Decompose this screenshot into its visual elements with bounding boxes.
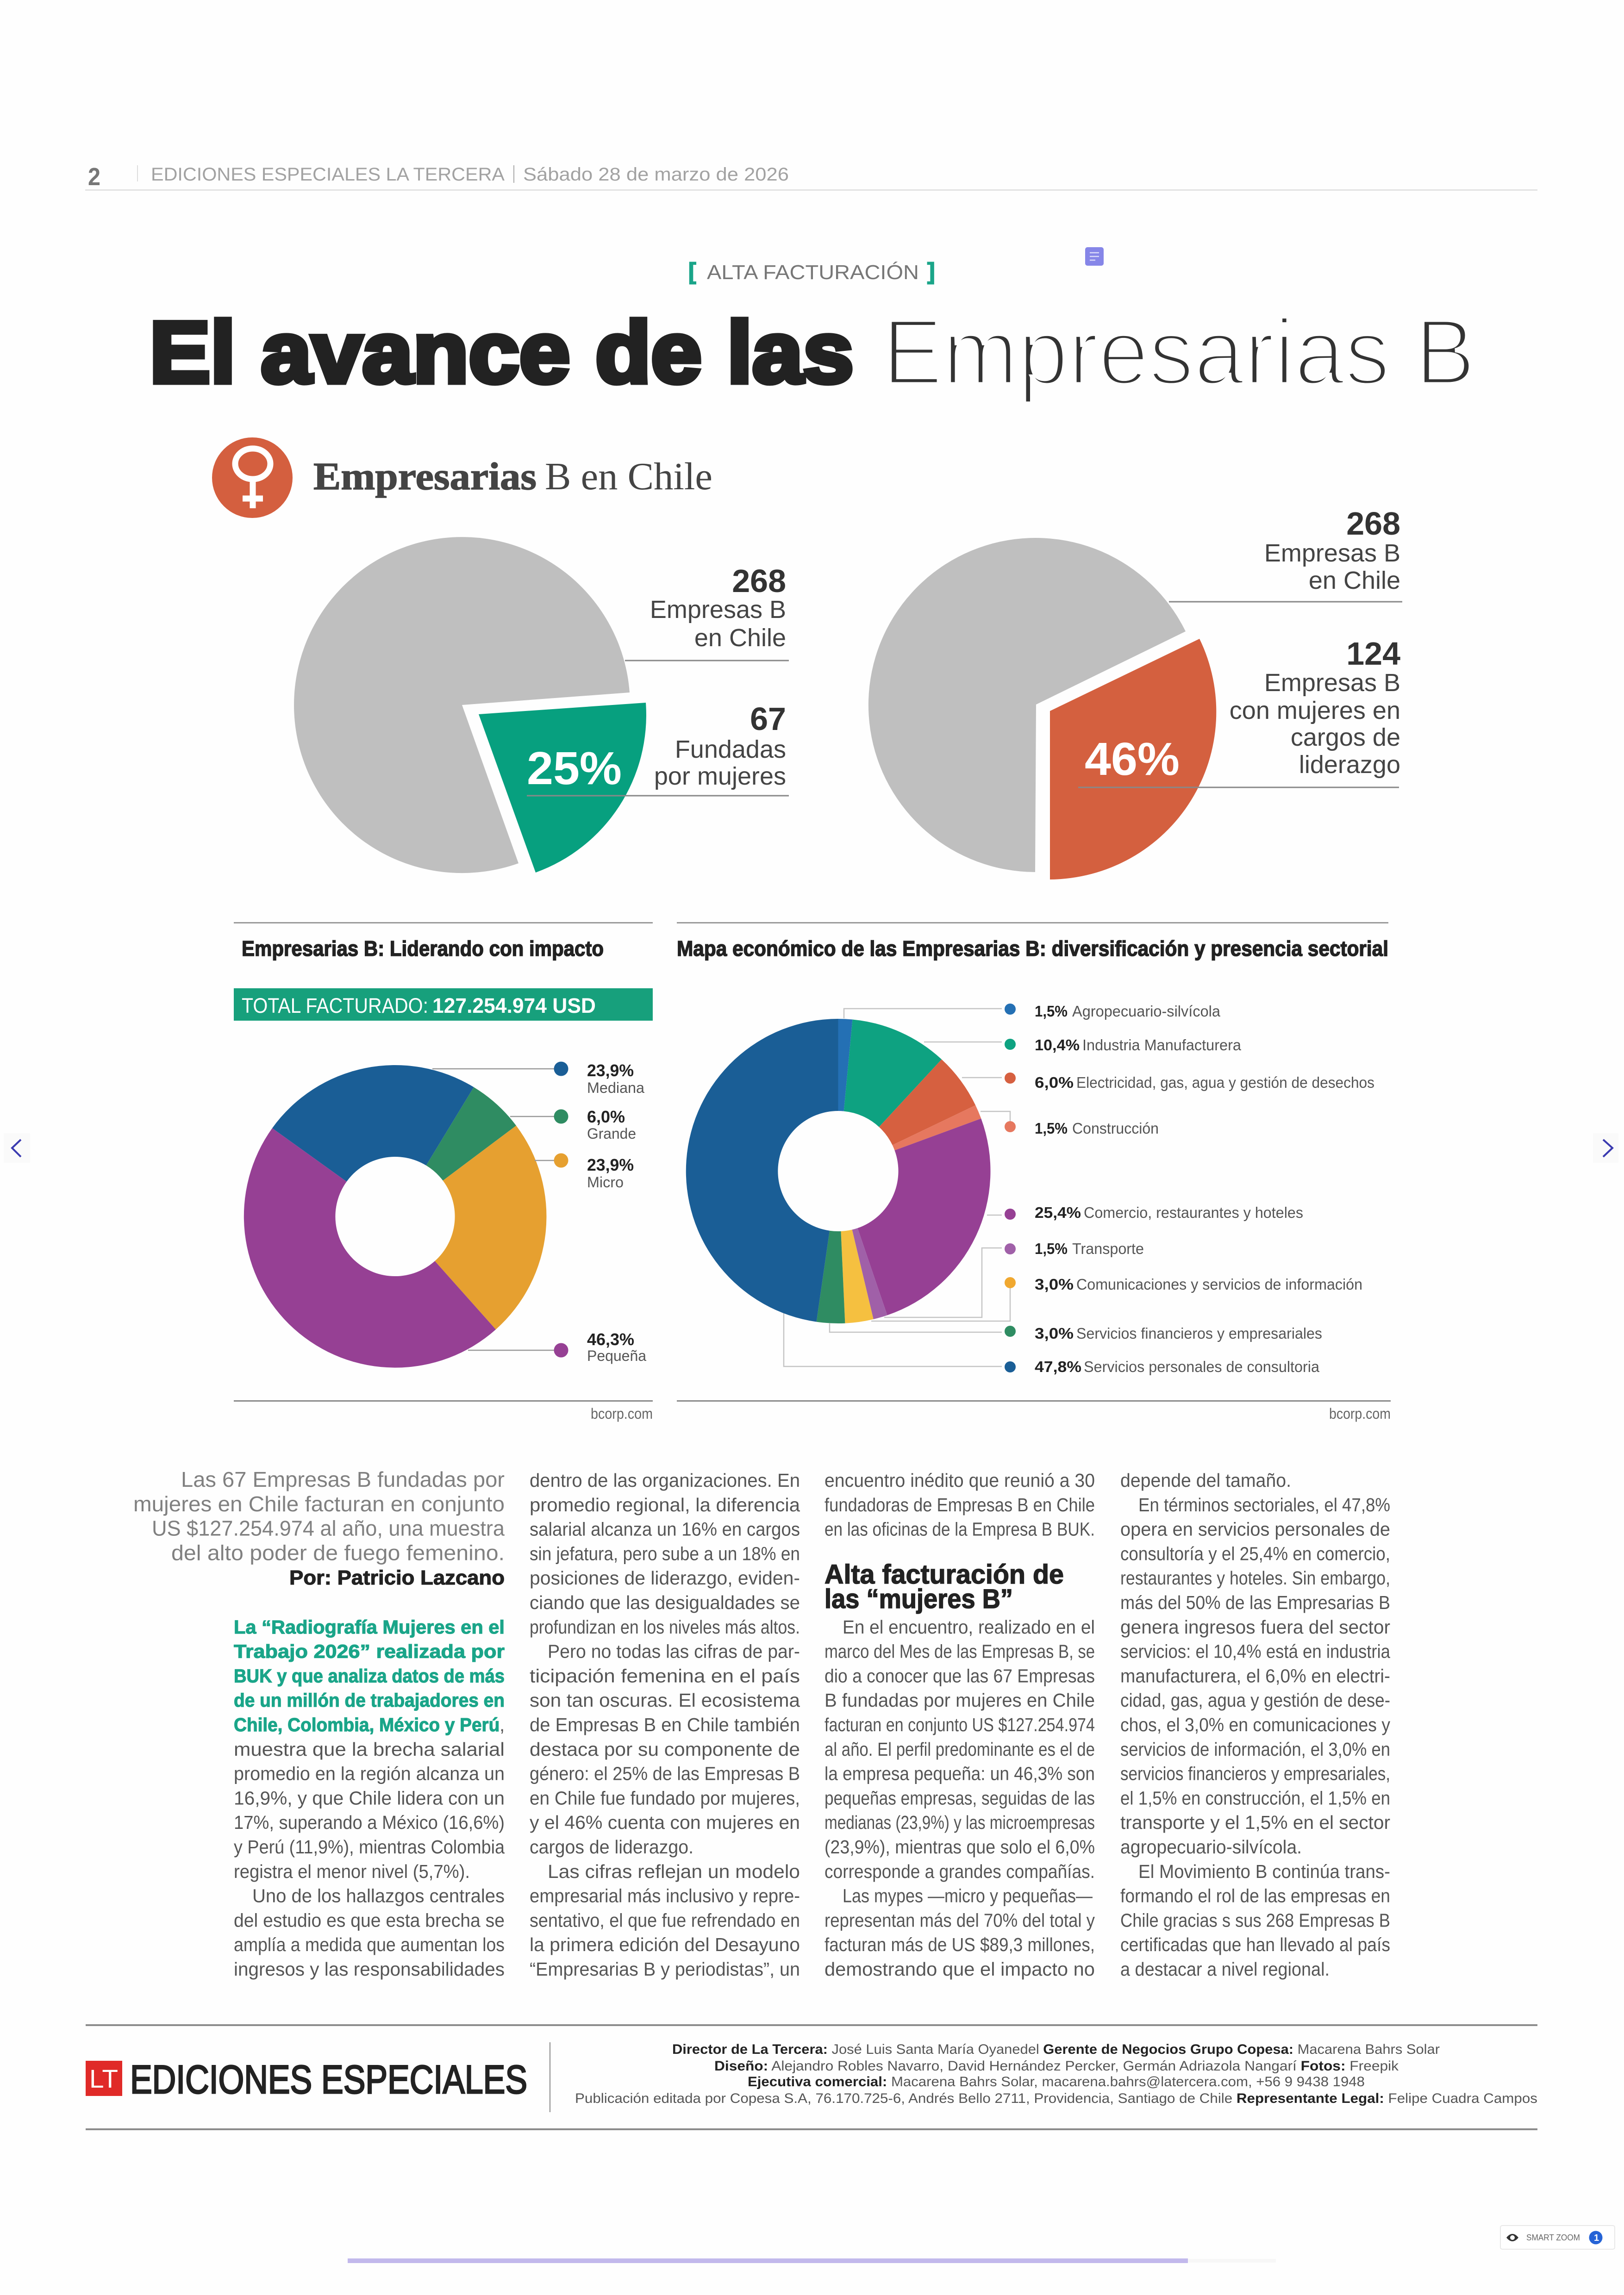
article column 3: en las oficinas de la Empresa B BUK.	[824, 1519, 1095, 1540]
article column 3: encuentro inédito que reunió a 30	[824, 1470, 1095, 1491]
article column 3: B fundadas por mujeres en Chile	[824, 1690, 1095, 1711]
subheading: alta facturación: las “mujeres B”	[824, 1584, 1013, 1614]
article column 2: empresarial más inclusivo y repre-	[530, 1885, 800, 1907]
article column 2: ciando que las desigualdades se	[530, 1592, 800, 1613]
article column 2: promedio regional, la diferencia	[530, 1494, 800, 1515]
legend: sectores: 1,5%	[1035, 1240, 1068, 1257]
pie chart: 25% fundadas por mujeres: 67	[750, 701, 786, 737]
article column 1: del estudio es que esta brecha se	[234, 1909, 505, 1931]
leader lines	[784, 1009, 1010, 1366]
legend: tamaño de empresa: Grande	[587, 1125, 636, 1142]
credits: Director de La Tercera: José Luis Santa María Oyanedel Gerente de Negocios Grupo Copesa: Macarena Bahrs Solar	[672, 2042, 1440, 2057]
article column 1: 17%, superando a México (16,6%)	[234, 1812, 505, 1833]
credits: Diseño: Alejandro Robles Navarro, David Hernández Percker, Germán Adriazola Nangarí Fotos: Freepik	[714, 2058, 1399, 2074]
legend: tamaño de empresa: 23,9%	[587, 1155, 634, 1174]
article column 4: formando el rol de las empresas en	[1120, 1885, 1390, 1907]
icon: note marker	[1085, 247, 1104, 266]
legend: sectores: Transporte	[1072, 1240, 1144, 1257]
logo: LT ediciones especiales: LT	[89, 2064, 118, 2093]
article column 4: servicios: el 10,4% está en industria	[1120, 1641, 1390, 1662]
article column 2: en Chile fue fundado por mujeres,	[530, 1787, 800, 1809]
source: bcorp.com	[1329, 1405, 1391, 1422]
banner: total facturado: TOTAL FACTURADO:	[242, 994, 428, 1017]
pie chart: 25% fundadas por mujeres: 268	[732, 563, 786, 599]
logo: LT ediciones especiales: EDICIONES ESPECIALES	[130, 2058, 527, 2102]
article column 2: la primera edición del Desayuno	[530, 1934, 800, 1955]
article column 4: chos, el 3,0% en comunicaciones y	[1120, 1714, 1390, 1735]
article column 3: pequeñas empresas, seguidas de las	[824, 1787, 1095, 1809]
article column 4: agropecuario-silvícola.	[1120, 1836, 1302, 1858]
article column 1: de un millón de trabajadores en	[234, 1690, 505, 1711]
article column 1: Chile, Colombia, México y Perú,	[234, 1714, 505, 1735]
article column 4: manufacturera, el 6,0% en electri-	[1120, 1665, 1390, 1686]
legend: tamaño de empresa: 6,0%	[587, 1107, 625, 1126]
article column 3: la empresa pequeña: un 46,3% son	[824, 1763, 1095, 1784]
pie chart: 25% fundadas por mujeres: 25%	[527, 742, 622, 794]
title	[150, 299, 1475, 404]
legend: tamaño de empresa: 23,9%	[587, 1061, 634, 1080]
donut chart: sectores	[686, 1019, 991, 1323]
legend: sectores: Construcción	[1072, 1120, 1159, 1137]
article column 1: y Perú (11,9%), mientras Colombia	[234, 1836, 505, 1858]
arrow: previous page	[4, 1133, 30, 1163]
legend: sectores: Electricidad, gas, agua y gestión de desechos	[1076, 1074, 1374, 1091]
scrollbar	[348, 2258, 1276, 2263]
pie chart: 25% fundadas por mujeres	[294, 537, 789, 873]
legend: tamaño de empresa: Mediana	[587, 1079, 644, 1096]
article column 4: servicios financieros y empresariales,	[1120, 1763, 1390, 1784]
banner: total facturado	[234, 988, 653, 1021]
legend: sectores: Comunicaciones y servicios de información	[1076, 1276, 1362, 1293]
smart zoom button: 1	[1594, 2233, 1599, 2243]
byline: Por: Patricio Lazcano	[289, 1566, 505, 1589]
pie chart: 46% mujeres en cargos de liderazgo: con mujeres en	[1230, 697, 1400, 724]
article column 3: facturan más de US $89,3 millones,	[824, 1934, 1095, 1955]
article column 4: cidad, gas, agua y gestión de dese-	[1120, 1690, 1390, 1711]
page header	[85, 163, 1537, 191]
article column 1: Uno de los hallazgos centrales	[252, 1885, 505, 1907]
article column 3: (23,9%), mientras que solo el 6,0%	[824, 1836, 1095, 1858]
article column 1: Trabajo 2026” realizada por	[234, 1641, 505, 1662]
arrow: next page	[1593, 1133, 1618, 1163]
heading: Empresarias B en Chile	[313, 455, 712, 498]
article column 4: certificadas que han llevado al país	[1120, 1934, 1390, 1955]
article column 1: ingresos y las responsabilidades	[234, 1958, 505, 1980]
source: bcorp.com	[591, 1405, 653, 1422]
credits	[575, 2042, 1537, 2106]
title: El avance de las	[150, 304, 854, 401]
article column 3: En el encuentro, realizado en el	[843, 1616, 1095, 1638]
article column 3: al año. El perfil predominante es el de	[824, 1739, 1095, 1760]
article column 2: ticipación femenina en el país	[530, 1665, 800, 1686]
article column 4: Chile gracias s sus 268 Empresas B	[1120, 1909, 1390, 1931]
article column 3: dio a conocer que las 67 Empresas	[824, 1665, 1095, 1686]
subheading: alta facturación: Alta facturación de	[824, 1559, 1064, 1590]
article column 3	[824, 1470, 1095, 1980]
article column 2: Las cifras reflejan un modelo	[548, 1861, 800, 1882]
pie chart: 46% mujeres en cargos de liderazgo: cargos de	[1291, 723, 1400, 751]
legend: sectores: 3,0%	[1035, 1325, 1074, 1342]
article column 2: sin jefatura, pero sube a un 18% en	[530, 1543, 800, 1564]
article column 2: son tan oscuras. El ecosistema	[530, 1690, 800, 1711]
article column 4: a destacar a nivel regional.	[1120, 1958, 1330, 1980]
panel: mapa económico	[677, 922, 1391, 1422]
page header: Sábado 28 de marzo de 2026	[523, 164, 789, 185]
article column 2: sentativo, el que fue refrendado en	[530, 1909, 800, 1931]
pie chart: 25% fundadas por mujeres: en Chile	[694, 624, 786, 652]
article column 4	[1120, 1470, 1390, 1980]
article column 1: muestra que la brecha salarial	[234, 1739, 505, 1760]
pie chart: 46% mujeres en cargos de liderazgo: Empresas B	[1264, 669, 1400, 697]
legend: sectores: 1,5%	[1035, 1003, 1068, 1020]
heading: Empresarias B en Chile: B en Chile	[545, 455, 712, 498]
legend: sectores	[1005, 1003, 1374, 1375]
article column 4: genera ingresos fuera del sector	[1120, 1616, 1390, 1638]
article column 1	[234, 1616, 505, 1980]
article lead	[133, 1467, 505, 1565]
banner: total facturado: 127.254.974 USD	[432, 994, 596, 1017]
article column 3: marco del Mes de las Empresas B, se	[824, 1641, 1095, 1662]
smart zoom button: SMART ZOOM	[1526, 2233, 1580, 2242]
article column 3: fundadoras de Empresas B en Chile	[824, 1494, 1095, 1515]
article column 2	[530, 1470, 800, 1980]
article column 2: Pero no todas las cifras de par-	[548, 1641, 800, 1662]
legend: tamaño de empresa: 46,3%	[587, 1330, 634, 1349]
legend: sectores: 3,0%	[1035, 1276, 1074, 1293]
article column 3: corresponde a grandes compañías.	[824, 1861, 1095, 1882]
heading: liderando con impacto: Empresarias B: Liderando con impacto	[242, 936, 604, 960]
article lead: US $127.254.974 al año, una muestra	[152, 1516, 505, 1540]
page header: 2	[88, 163, 100, 191]
article column 1: 16,9%, y que Chile lidera con un	[234, 1787, 505, 1809]
pie chart: 25% fundadas por mujeres: Fundadas	[675, 736, 786, 763]
legend: sectores: 47,8%	[1035, 1358, 1081, 1375]
article column 4: restaurantes y hoteles. Sin embargo,	[1120, 1567, 1390, 1589]
article column 1: La “Radiografía Mujeres en el	[234, 1616, 505, 1638]
icon: female symbol	[212, 437, 293, 518]
article column 4: servicios de información, el 3,0% en	[1120, 1739, 1390, 1760]
page header: EDICIONES ESPECIALES LA TERCERA	[151, 164, 505, 185]
article column 1: amplía a medida que aumentan los	[234, 1934, 505, 1955]
legend: sectores: Industria Manufacturera	[1082, 1036, 1242, 1054]
article column 4: el 1,5% en construcción, el 1,5% en	[1120, 1787, 1390, 1809]
article lead: Las 67 Empresas B fundadas por	[181, 1467, 505, 1491]
pie chart: 46% mujeres en cargos de liderazgo: Empresas B	[1264, 539, 1400, 567]
pie chart: 46% mujeres en cargos de liderazgo: 46%	[1085, 733, 1180, 785]
heading: Empresarias B en Chile: Empresarias	[313, 455, 537, 498]
article column 2: y el 46% cuenta con mujeres en	[530, 1812, 800, 1833]
article column 2: posiciones de liderazgo, eviden-	[530, 1567, 800, 1589]
pie chart: 46% mujeres en cargos de liderazgo: 268	[1346, 505, 1400, 542]
pie chart: 46% mujeres en cargos de liderazgo	[868, 505, 1402, 879]
section tag: alta facturación: ]	[927, 258, 935, 284]
article column 1: registra el menor nivel (5,7%).	[234, 1861, 470, 1882]
credits: Publicación editada por Copesa S.A, 76.170.725-6, Andrés Bello 2711, Providencia, Santiago de Chile Representante Legal: Felipe Cuadra Campos	[575, 2091, 1537, 2106]
article column 3: representan más del 70% del total y	[824, 1909, 1095, 1931]
heading: mapa económico: Mapa económico de las Empresarias B: diversificación y presencia sectorial	[677, 936, 1388, 960]
pie chart: 25% fundadas por mujeres: Empresas B	[650, 596, 786, 624]
article column 4: transporte y el 1,5% en el sector	[1120, 1812, 1390, 1833]
panel: liderando con impacto	[234, 922, 653, 1422]
title: Empresarias B	[882, 299, 1475, 404]
legend: sectores: Comercio, restaurantes y hoteles	[1084, 1204, 1303, 1221]
smart zoom button	[1500, 2226, 1615, 2249]
article column 1: BUK y que analiza datos de más	[234, 1665, 505, 1686]
article column 2: profundizan en los niveles más altos.	[530, 1616, 800, 1638]
pie chart: 46% mujeres en cargos de liderazgo: 124	[1346, 636, 1400, 672]
legend: sectores: Agropecuario-silvícola	[1072, 1003, 1221, 1020]
legend: sectores: 10,4%	[1035, 1036, 1080, 1054]
article column 1: promedio en la región alcanza un	[234, 1763, 505, 1784]
legend: sectores: 25,4%	[1035, 1204, 1081, 1221]
pie chart: 46% mujeres en cargos de liderazgo: en Chile	[1309, 567, 1400, 594]
article column 2: cargos de liderazgo.	[530, 1836, 693, 1858]
article column 2: de Empresas B en Chile también	[530, 1714, 800, 1735]
section tag: alta facturación: [	[688, 258, 696, 284]
legend: sectores: Servicios financieros y empresariales	[1076, 1325, 1322, 1342]
article column 3: facturan en conjunto US $127.254.974	[824, 1714, 1095, 1735]
article column 4: depende del tamaño.	[1120, 1470, 1291, 1491]
article column 3: Las mypes —micro y pequeñas—	[843, 1885, 1093, 1907]
article column 4: El Movimiento B continúa trans-	[1138, 1861, 1390, 1882]
article column 4: más del 50% de las Empresarias B	[1120, 1592, 1390, 1613]
pie chart: 25% fundadas por mujeres: por mujeres	[654, 762, 786, 790]
section tag: alta facturación: ALTA FACTURACIÓN	[707, 261, 919, 284]
credits: Ejecutiva comercial: Macarena Bahrs Solar, macarena.bahrs@latercera.com, +56 9 9438 1948	[748, 2074, 1365, 2089]
legend: sectores: Servicios personales de consultoria	[1084, 1358, 1320, 1375]
article column 2: dentro de las organizaciones. En	[530, 1470, 800, 1491]
legend: sectores: 1,5%	[1035, 1120, 1068, 1137]
article column 3: demostrando que el impacto no	[824, 1958, 1095, 1980]
article lead: del alto poder de fuego femenino.	[171, 1540, 505, 1565]
subheading: alta facturación	[824, 1559, 1064, 1614]
article column 2: salarial alcanza un 16% en cargos	[530, 1519, 800, 1540]
article column 2: género: el 25% de las Empresas B	[530, 1763, 800, 1784]
article lead: mujeres en Chile facturan en conjunto	[133, 1492, 505, 1516]
legend: tamaño de empresa: Micro	[587, 1174, 624, 1191]
article column 3: medianas (23,9%) y las microempresas	[824, 1812, 1095, 1833]
article column 4: consultoría y el 25,4% en comercio,	[1120, 1543, 1390, 1564]
pie chart: 46% mujeres en cargos de liderazgo: liderazgo	[1299, 751, 1400, 779]
article column 4: opera en servicios personales de	[1120, 1519, 1390, 1540]
legend: tamaño de empresa	[432, 1061, 646, 1364]
article column 4: En términos sectoriales, el 47,8%	[1138, 1494, 1390, 1515]
article column 2: destaca por su componente de	[530, 1739, 800, 1760]
legend: tamaño de empresa: Pequeña	[587, 1347, 646, 1364]
legend: sectores: 6,0%	[1035, 1074, 1074, 1091]
footer	[86, 2024, 1537, 2130]
donut chart: facturación por tamaño	[244, 1065, 546, 1368]
article column 2: “Empresarias B y periodistas”, un	[530, 1958, 800, 1980]
